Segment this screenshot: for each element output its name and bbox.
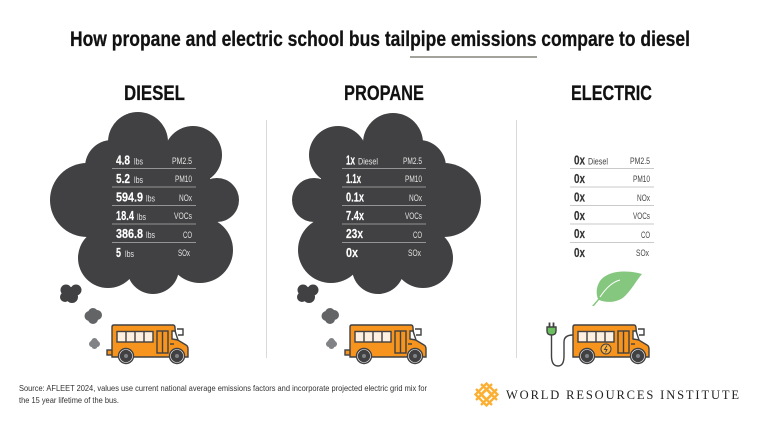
emissions table: diesel: 18.4 bbox=[116, 209, 134, 223]
emissions table: propane: SOx bbox=[408, 248, 421, 258]
emissions table: propane: 0.1x bbox=[346, 190, 364, 204]
emissions table: diesel: lbs bbox=[125, 249, 134, 260]
emissions table: propane: NOx bbox=[409, 193, 422, 203]
exhaust puffs: diesel bbox=[60, 284, 102, 349]
icon: plug and cable bbox=[547, 322, 573, 366]
icon: electric school bus bbox=[547, 322, 649, 366]
emissions table: propane: 23x bbox=[346, 227, 363, 241]
emissions cloud: propane bbox=[292, 113, 481, 294]
icon: bus body bbox=[573, 325, 649, 364]
icon: leaf bbox=[592, 272, 642, 306]
panel: diesel bbox=[50, 82, 239, 364]
emissions table: diesel: 5.2 bbox=[116, 172, 130, 186]
heading: propane: PROPANE bbox=[344, 82, 424, 105]
emissions table: diesel: lbs bbox=[146, 230, 155, 241]
emissions table: electric: CO bbox=[641, 230, 650, 240]
emissions table: propane: CO bbox=[413, 230, 422, 240]
logo: World Resources Institute: WORLD RESOURCES INSTITUTE bbox=[506, 388, 739, 402]
emissions table: diesel: NOx bbox=[179, 193, 192, 203]
emissions table: electric: PM2.5 bbox=[630, 156, 650, 166]
emissions table: electric: 0x bbox=[574, 227, 585, 241]
heading: diesel: DIESEL bbox=[124, 82, 185, 105]
emissions table: diesel: 5 bbox=[116, 246, 121, 260]
emissions table: propane: PM2.5 bbox=[403, 156, 422, 166]
icon: diesel school bus bbox=[107, 325, 188, 364]
source note bbox=[19, 383, 427, 405]
exhaust puffs: propane bbox=[297, 284, 339, 349]
emissions table: electric: NOx bbox=[637, 193, 650, 203]
emissions table: electric: 0x bbox=[574, 190, 585, 204]
emissions table: propane: VOCs bbox=[405, 211, 422, 221]
emissions table: electric: 0x bbox=[574, 246, 585, 260]
emissions table: electric: 0x bbox=[574, 172, 585, 186]
emissions table: propane bbox=[342, 154, 426, 260]
icon: propane school bus bbox=[345, 325, 426, 364]
source note: Source: AFLEET 2024, values use current national average emissions factors and incorporate projected electric grid mix for bbox=[19, 383, 427, 393]
emissions table: electric: 0x bbox=[574, 209, 585, 223]
emissions table: diesel: VOCs bbox=[174, 211, 192, 221]
emissions cloud: diesel bbox=[50, 112, 239, 294]
emissions table: propane: 7.4x bbox=[346, 209, 364, 223]
emissions table: diesel bbox=[112, 154, 196, 260]
emissions table: electric: PM10 bbox=[633, 174, 650, 184]
emissions table: diesel: lbs bbox=[137, 212, 146, 223]
icon: WRI lattice mark bbox=[476, 384, 498, 406]
emissions table: electric: Diesel bbox=[588, 156, 608, 168]
emissions table: diesel: 4.8 bbox=[116, 154, 130, 168]
emissions table: propane: 0x bbox=[346, 246, 358, 260]
emissions table: diesel: PM2.5 bbox=[172, 156, 192, 166]
emissions table: diesel: SOx bbox=[178, 248, 190, 258]
emissions table: diesel: 386.8 bbox=[116, 227, 143, 241]
emissions table: propane: 1.1x bbox=[346, 172, 361, 186]
emissions table: propane: PM10 bbox=[405, 174, 422, 184]
emissions table: diesel: lbs bbox=[146, 194, 155, 204]
emissions table: diesel: CO bbox=[183, 230, 192, 240]
source note: the 15 year lifetime of the bus. bbox=[19, 395, 119, 405]
emissions table: electric bbox=[570, 154, 654, 260]
emissions table: propane: 1x bbox=[346, 154, 355, 168]
emissions table: diesel: lbs bbox=[134, 156, 143, 168]
emissions table: electric: 0x bbox=[574, 154, 585, 168]
panel: propane bbox=[292, 82, 481, 364]
emissions table: electric: VOCs bbox=[633, 211, 650, 221]
emissions table: electric: SOx bbox=[636, 248, 649, 258]
emissions table: diesel: 594.9 bbox=[116, 190, 143, 204]
emissions table: propane: Diesel bbox=[358, 156, 378, 168]
logo: World Resources Institute bbox=[476, 384, 739, 406]
emissions table: diesel: lbs bbox=[134, 175, 143, 186]
panel: electric bbox=[547, 82, 654, 366]
emissions table: diesel: PM10 bbox=[175, 174, 192, 184]
heading: electric: ELECTRIC bbox=[571, 82, 652, 105]
